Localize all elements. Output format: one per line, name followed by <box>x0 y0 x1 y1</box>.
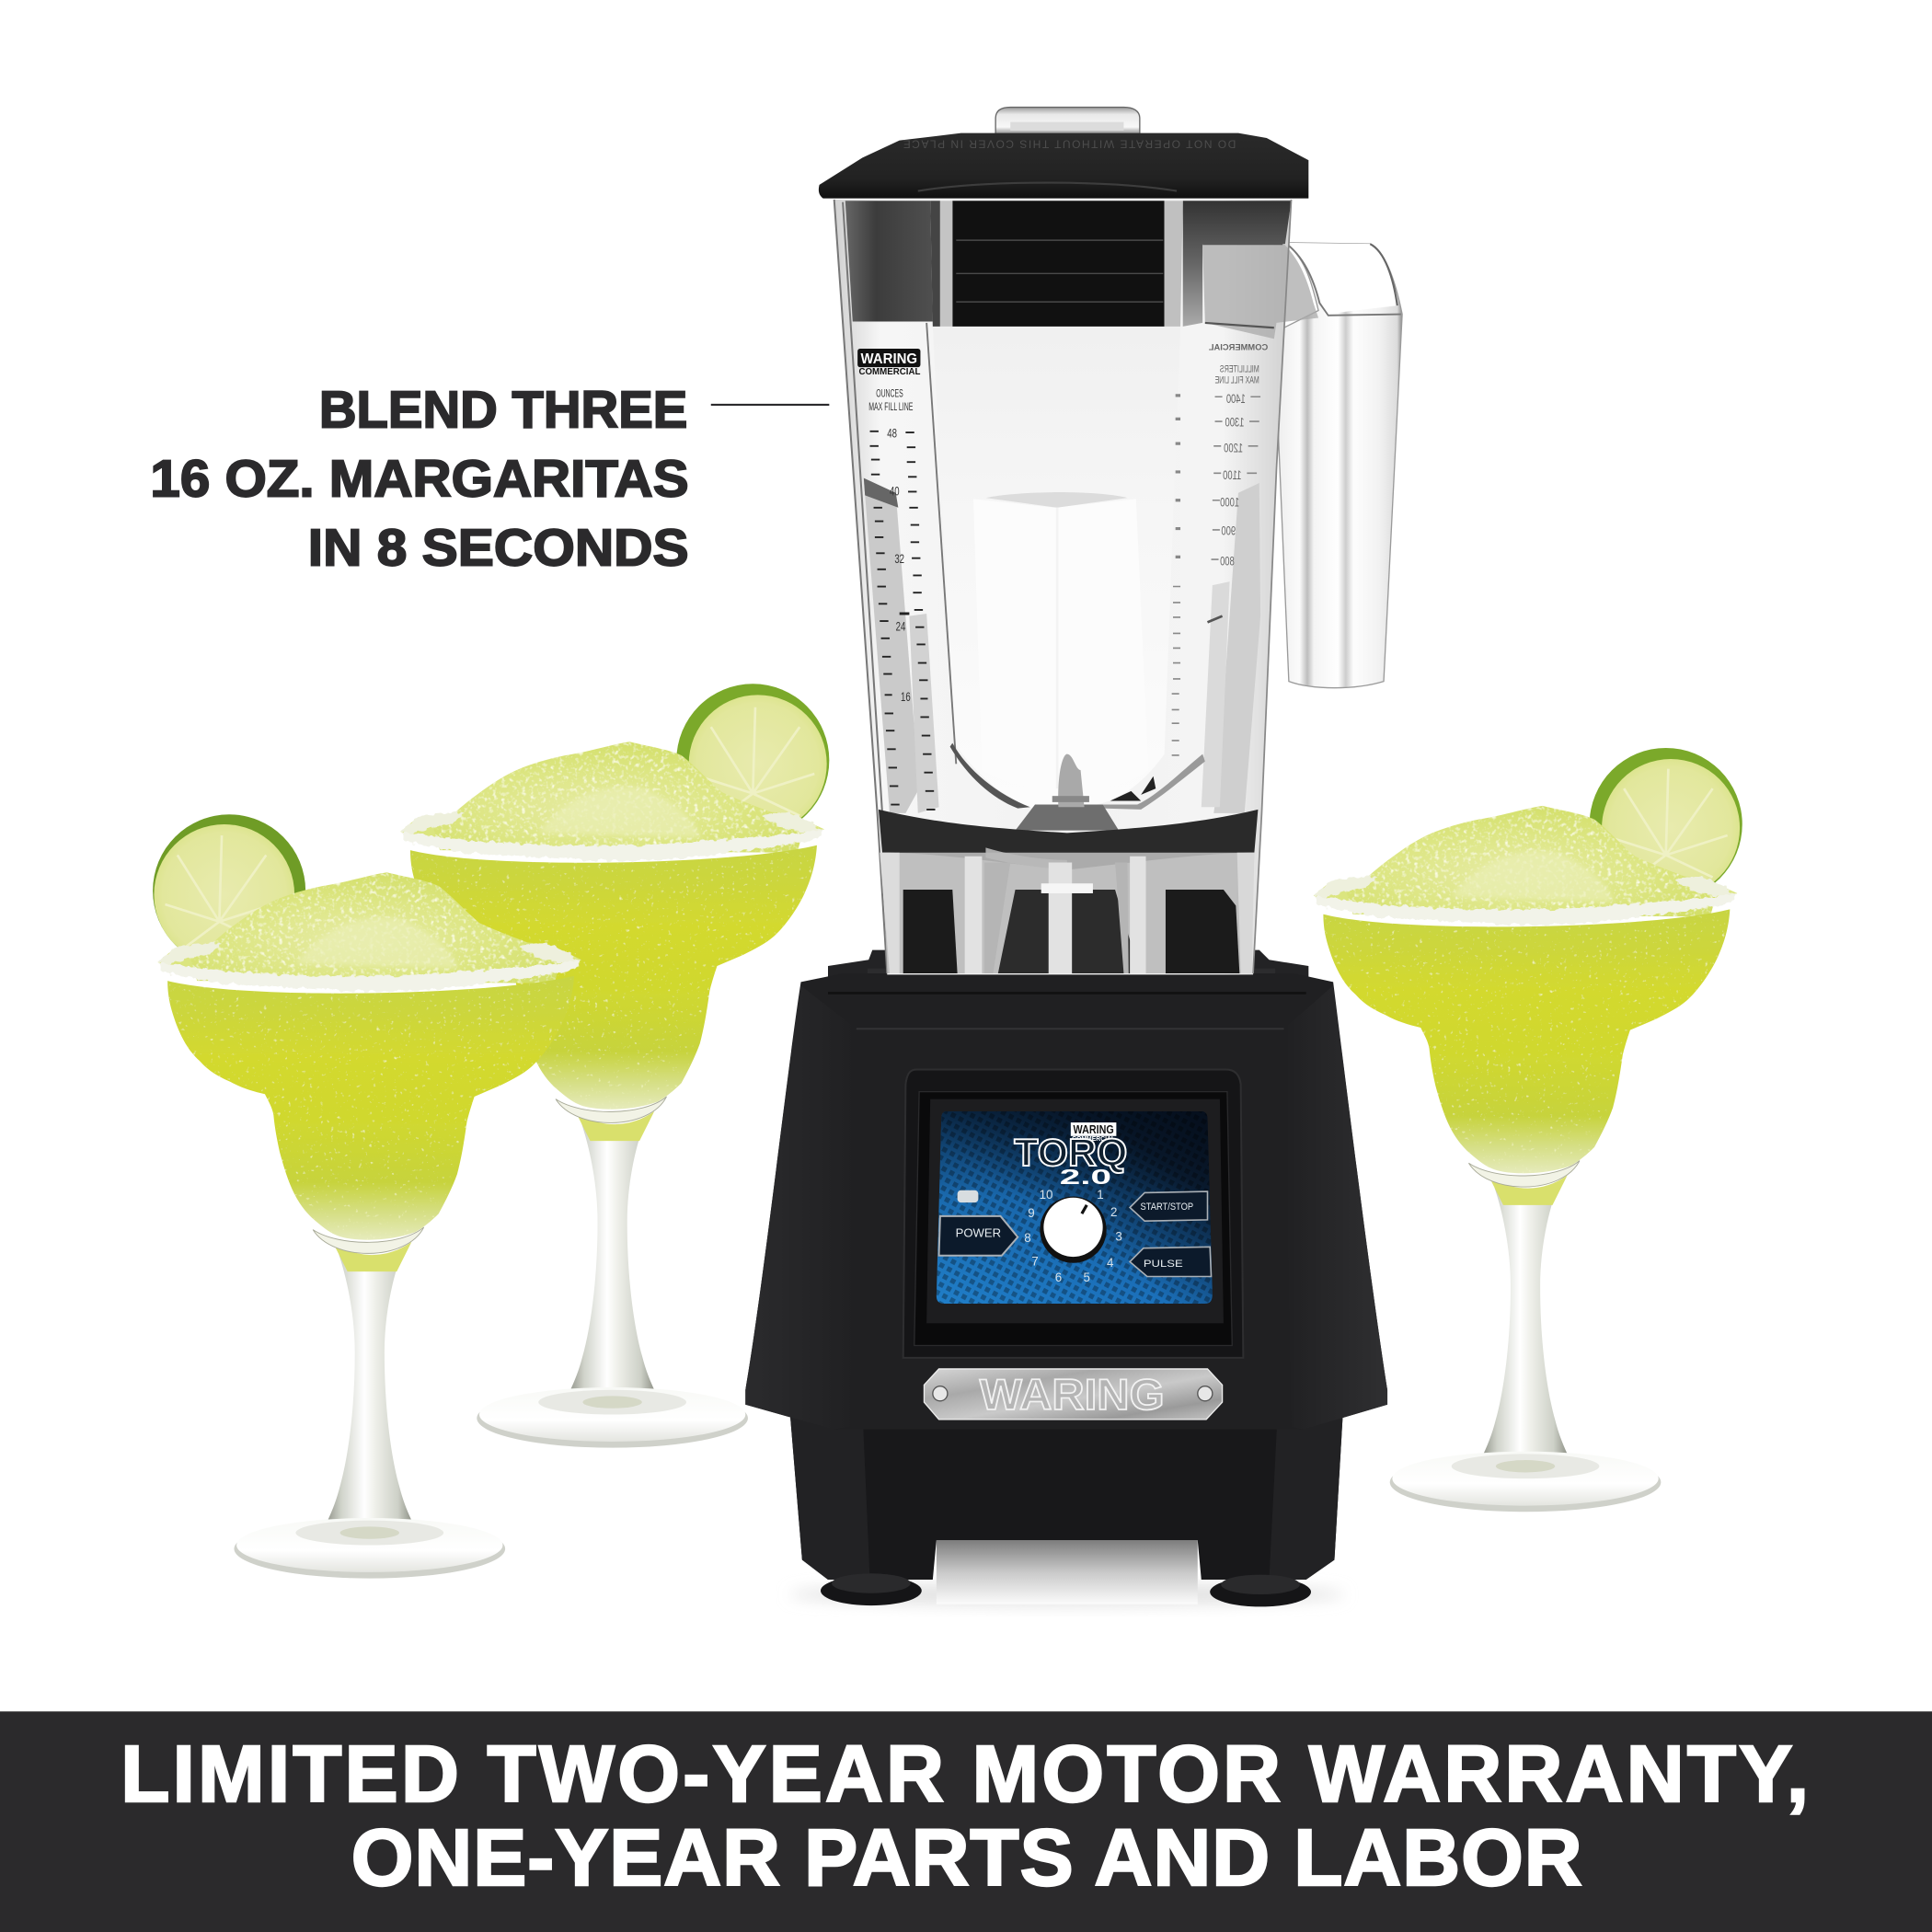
measurement ticks: ounces <box>870 431 936 810</box>
pulse button: PULSE <box>1144 1259 1183 1270</box>
margarita: front left <box>153 814 581 1579</box>
speed dial numbers: 8 <box>1024 1231 1031 1245</box>
millilitres scale text (mirrored, seen through the jar): 1000 <box>1220 497 1239 510</box>
margarita: centre back <box>400 684 829 1448</box>
brand label: jar: WARING <box>860 351 917 367</box>
glass: left <box>157 872 581 1579</box>
lid ridge <box>918 183 1177 191</box>
margarita: right <box>1314 748 1742 1512</box>
power button <box>939 1216 1018 1256</box>
right fold <box>1213 483 1260 813</box>
right foot <box>1210 1575 1311 1606</box>
speed dial numbers: 6 <box>1055 1271 1062 1284</box>
warranty banner <box>0 1711 1932 1932</box>
speed dial numbers: 4 <box>1107 1256 1114 1270</box>
speed dial numbers: 9 <box>1028 1206 1035 1220</box>
floor shadow <box>789 1540 1344 1605</box>
base collar tier <box>868 969 1275 984</box>
Waring name plate: WARING <box>980 1371 1165 1419</box>
brand label: jar <box>857 349 920 377</box>
millilitres scale text (mirrored, seen through the jar): MILLILITERS <box>1220 363 1259 374</box>
control panel bezel <box>903 1069 1243 1358</box>
blender lid <box>819 133 1308 199</box>
lime slice: right glass <box>1590 748 1742 901</box>
callout: blend three margaritas: 16 OZ. MARGARITAS <box>150 450 689 508</box>
millilitres scale text (mirrored, seen through the jar): 900 <box>1221 525 1236 538</box>
speed dial numbers <box>1024 1188 1122 1284</box>
Torq logo: 2.0 <box>1060 1165 1111 1189</box>
speed dial numbers: 1 <box>1097 1188 1104 1202</box>
warranty line one: LIMITED TWO-YEAR MOTOR WARRANTY, <box>121 1730 1809 1819</box>
ounces scale text: 48 <box>887 426 897 440</box>
callout: blend three margaritas: IN 8 SECONDS <box>308 519 689 577</box>
millilitres scale text (mirrored, seen through the jar): 1300 <box>1225 417 1244 430</box>
ounces scale text: 24 <box>896 620 906 634</box>
Torq logo: TORQ <box>1014 1131 1127 1174</box>
inner centre block <box>973 499 1148 791</box>
Waring name plate <box>924 1369 1223 1420</box>
measurement ticks: millilitres <box>1172 396 1260 755</box>
start/stop button: START/STOP <box>1141 1202 1193 1213</box>
ounces scale text <box>868 386 913 704</box>
Waring badge <box>1071 1122 1116 1143</box>
millilitres scale text (mirrored, seen through the jar): 800 <box>1220 556 1235 569</box>
warranty line two: ONE-YEAR PARTS AND LABOR <box>351 1813 1582 1903</box>
left fold <box>864 478 919 813</box>
dark band: right <box>1183 201 1292 327</box>
jar side edges <box>834 200 887 973</box>
speed dial numbers: 5 <box>1084 1271 1090 1284</box>
Waring badge: WARING <box>1074 1122 1114 1136</box>
millilitres scale text (mirrored, seen through the jar): MAX FILL LINE <box>1215 375 1259 386</box>
millilitres scale text (mirrored, seen through the jar): 1400 <box>1226 394 1246 406</box>
ounces scale text: 16 <box>901 690 911 704</box>
pitcher handle <box>1274 243 1402 688</box>
Waring badge: COMMERCIAL <box>1072 1134 1116 1143</box>
speed dial numbers: 7 <box>1031 1254 1039 1268</box>
jar collar band <box>879 810 1258 870</box>
base shoulder body <box>745 973 1387 1430</box>
callout: blend three margaritas: BLEND THREE <box>319 381 687 439</box>
millilitres scale text (mirrored, seen through the jar): 1100 <box>1223 470 1241 482</box>
ounces scale text: OUNCES <box>876 386 903 399</box>
speed dial numbers: 10 <box>1040 1188 1052 1202</box>
pour spout <box>1202 244 1318 339</box>
glass: right <box>1314 806 1737 1512</box>
motor base <box>745 950 1387 1606</box>
base collar <box>828 950 1308 993</box>
jar foot <box>880 853 1254 973</box>
lid embossed lettering: DO NOT OPERATE WITHOUT THIS COVER IN PLACE <box>903 138 1236 151</box>
blender <box>745 108 1402 1606</box>
brand label: jar: COMMERCIAL <box>858 367 920 377</box>
blue control screen <box>937 1111 1213 1304</box>
lime slice: centre glass <box>676 684 829 836</box>
callout: blend three margaritas <box>150 381 689 577</box>
blade assembly <box>950 743 1205 831</box>
pulse button <box>1130 1247 1212 1277</box>
millilitres scale text (mirrored, seen through the jar): 1200 <box>1224 443 1243 455</box>
dark band: left <box>845 201 933 322</box>
glass: centre <box>400 742 824 1448</box>
millilitres scale text (mirrored, seen through the jar) <box>1208 342 1268 569</box>
base lower body <box>789 1410 1343 1580</box>
millilitres scale text (mirrored, seen through the jar): COMMERCIAL <box>1208 342 1268 351</box>
power indicator light <box>958 1190 978 1202</box>
measuring cap <box>995 108 1140 135</box>
power button: POWER <box>956 1226 1001 1240</box>
ounces scale text: 40 <box>890 484 900 498</box>
speed dial knob <box>1040 1196 1107 1263</box>
ounces scale text: 32 <box>894 552 904 566</box>
inner jar cavity <box>933 327 1180 811</box>
left foot <box>821 1573 922 1605</box>
ounces scale text: MAX FILL LINE <box>868 400 913 413</box>
speed dial numbers: 3 <box>1115 1230 1122 1244</box>
dark band: centre <box>952 201 1165 327</box>
start/stop button <box>1130 1191 1207 1221</box>
blender jar <box>834 200 1318 974</box>
lime slice: left glass <box>153 814 305 967</box>
callout leader line <box>711 404 829 406</box>
speed dial numbers: 2 <box>1110 1205 1117 1219</box>
